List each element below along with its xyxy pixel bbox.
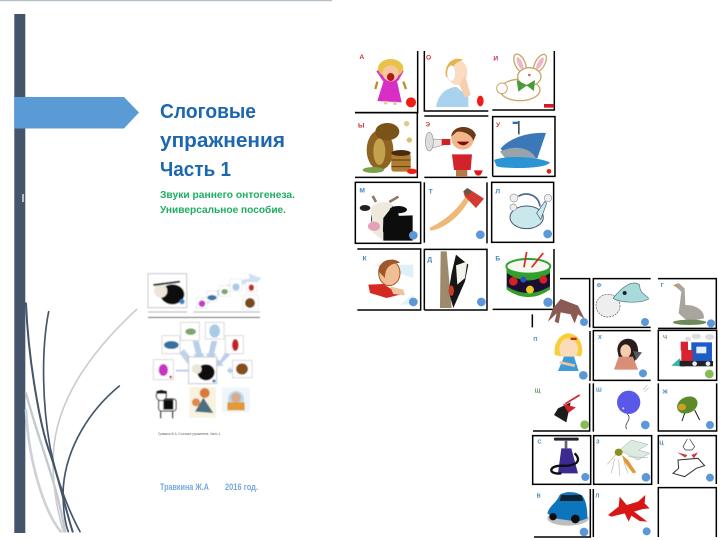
decorative sidebar bar [14,14,25,533]
card: Ж beetle [658,383,717,431]
card: З mosquito [594,436,652,484]
bottom three pictures [156,387,250,418]
card: Т axe [424,182,487,243]
card: К coughing boy: К [363,256,368,263]
card: А crying girl: А [359,54,364,61]
card: И rabbit: И [493,55,498,62]
row labels: Щ [535,389,541,395]
card: Б drum: Б [495,256,500,263]
author and year: 2016 год. [225,482,258,492]
card: П girl: П [533,337,537,343]
decorative curved grass strokes [26,303,137,532]
title: упражнения [160,130,285,152]
subtitle [160,190,295,216]
card: С pump [533,436,591,484]
card: П girl [533,331,590,381]
card: Г goose: Г [661,283,665,289]
title [160,101,285,181]
card: Х woman: Х [598,335,602,341]
card: Х woman [593,331,651,380]
card: В wolf [532,279,590,327]
card: Л kettle: Л [495,188,500,195]
card: С pump: С [537,440,541,446]
card: К coughing boy [357,249,421,310]
card: И rabbit [492,51,554,110]
card: Д woodpecker: Д [427,256,432,263]
card: Э boy with megaphone: Э [425,122,430,129]
card: Ц sketch hand: Ц [659,440,664,446]
central diagram [153,322,252,384]
tiny captions [148,312,260,318]
card: empty [658,488,716,537]
card: О toothache man: О [426,55,431,62]
panel: consonant cards right column lower [533,383,717,537]
panel: consonant cards right column upper [532,279,717,395]
big cow card [148,274,187,308]
row labels [535,388,669,395]
card: Ф owl cloud [593,279,651,327]
card: Ш balloon [593,383,650,432]
arrow banner [14,97,139,128]
card: Ы bear: Ы [358,123,365,130]
card: Л plane [593,489,651,537]
thumbnail caption: Травкина Ж.А. Слоговые упражнения. Часть 1. [158,431,221,436]
row labels: Ж [662,389,669,395]
panel: vowel cards [355,51,555,177]
card: Т axe: Т [429,188,433,195]
title: Слоговые [160,101,256,123]
row labels: Ш [596,388,602,394]
card: Г goose [658,279,716,328]
rising arrow with cards [195,273,262,310]
card: О toothache man [424,51,488,111]
card: У ship: У [496,122,501,129]
card: Л kettle [492,182,554,242]
card: В car: В [537,494,541,500]
card: Б drum [493,249,554,309]
card: Ы bear [355,113,417,177]
card: Щ brush [533,383,590,431]
card: Д woodpecker [424,249,487,310]
card: Л plane: Л [595,494,599,500]
card: З mosquito: З [596,440,600,446]
card: М cow: М [359,188,365,195]
panel: consonant cards [355,182,554,310]
author and year: Травкина Ж.А [160,482,209,492]
title: Часть 1 [160,159,231,181]
card: У ship [493,117,555,176]
card: В car [534,489,590,537]
author and year [160,482,258,492]
card: М cow [355,182,421,243]
subtitle: Универсальное пособие. [160,204,286,216]
card: Э boy with megaphone [424,116,488,177]
subtitle: Звуки раннего онтогенеза. [160,190,295,201]
card: Ч train: Ч [663,335,667,341]
cover thumbnail illustration [148,273,262,418]
card: Ч train [658,330,717,380]
card: А crying girl [355,51,418,113]
card: Ц sketch hand [658,436,716,484]
card: Ф owl cloud: Ф [597,283,602,289]
